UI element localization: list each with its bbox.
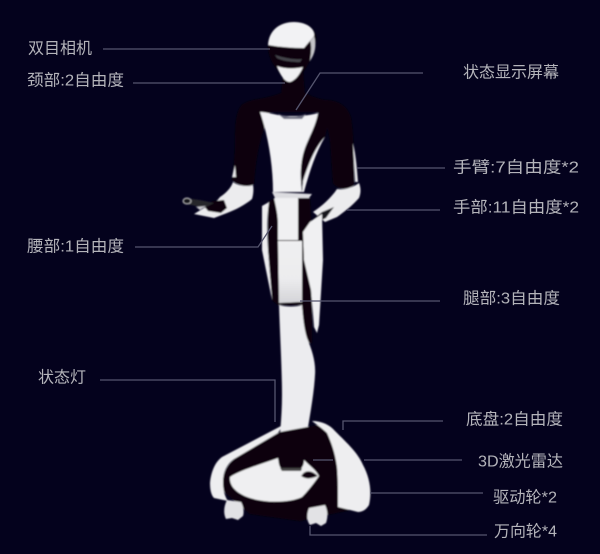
wheels xyxy=(224,500,244,520)
robot torso and arms xyxy=(232,92,358,192)
label: waist: 腰部:1自由度 xyxy=(27,238,124,256)
label: leg: 腿部:3自由度 xyxy=(463,290,560,308)
label: status light: 状态灯 xyxy=(38,368,86,386)
label: status screen: 状态显示屏幕 xyxy=(463,64,559,82)
robot head xyxy=(268,22,316,96)
robot right forearm and hand xyxy=(295,183,360,232)
label: caster wheels: 万向轮*4 xyxy=(494,522,557,540)
leader lines xyxy=(100,49,487,535)
robot lower leg xyxy=(278,305,315,465)
3D lidar xyxy=(301,471,318,479)
label: chassis: 底盘:2自由度 xyxy=(466,410,563,428)
label: hand: 手部:11自由度*2 xyxy=(453,198,579,216)
robot waist and hip xyxy=(262,192,323,343)
label: binocular camera: 双目相机 xyxy=(28,40,92,58)
robot left forearm and hand xyxy=(183,182,253,218)
label: 3D lidar: 3D激光雷达 xyxy=(478,452,563,470)
robot illustration xyxy=(183,22,370,526)
label: drive wheels: 驱动轮*2 xyxy=(493,488,557,506)
label: arm: 手臂:7自由度*2 xyxy=(453,158,579,176)
robot base xyxy=(210,421,370,526)
label: neck: 颈部:2自由度 xyxy=(27,72,124,90)
